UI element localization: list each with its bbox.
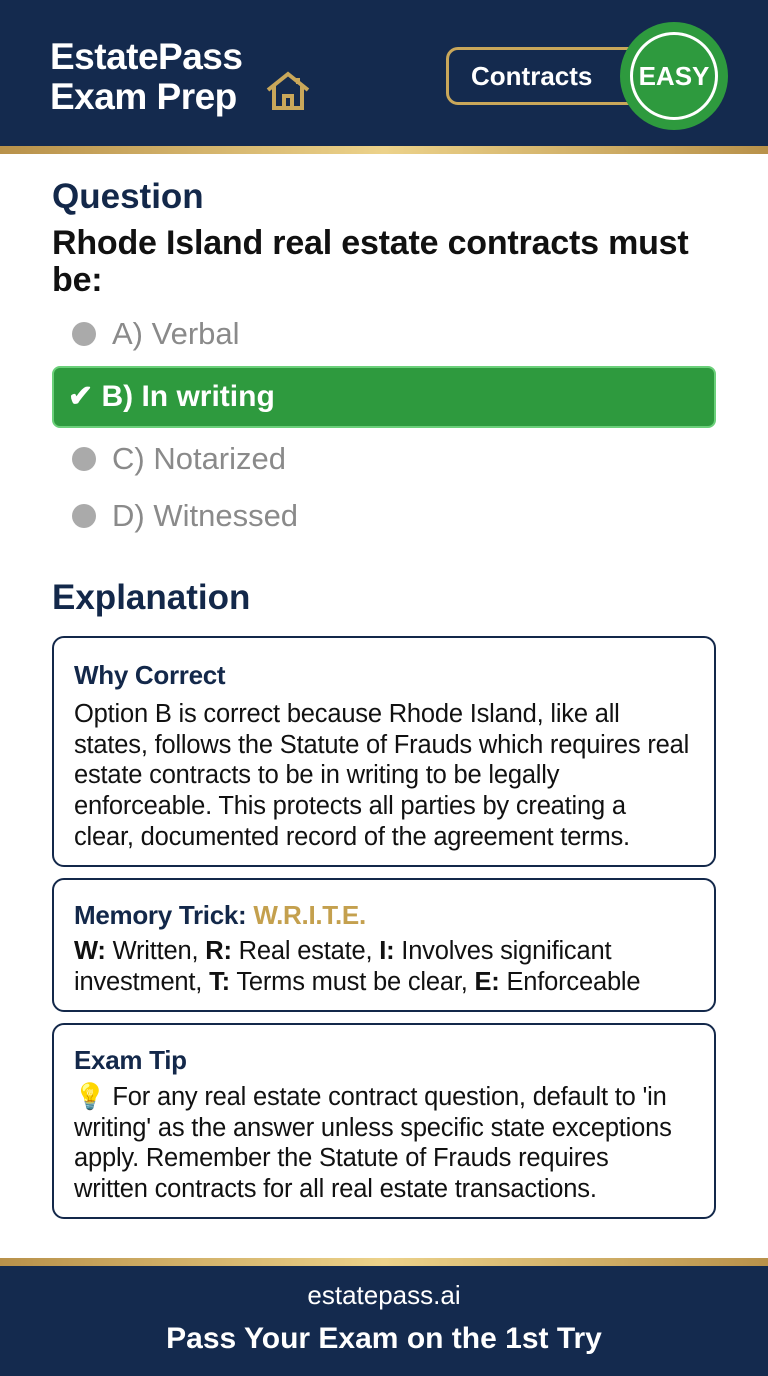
panel: exam tip: apply. Remember the Statute of Frauds requires	[74, 1144, 609, 1172]
heading: Question: Question	[52, 177, 204, 216]
panel: exam tip: written contracts for all real estate transactions.	[74, 1175, 597, 1203]
logo title: EstatePass	[50, 36, 242, 77]
category badge	[446, 47, 646, 105]
question text: Rhode Island real estate contracts must	[52, 224, 689, 262]
panel: exam tip: Exam Tip	[74, 1045, 187, 1075]
header	[0, 0, 768, 146]
panel: why correct: states, follows the Statute of Frauds which requires real	[74, 731, 689, 759]
panel: memory trick: W: Written, R: Real estate, I: Involves significant	[74, 937, 611, 965]
panel: why correct: Option B is correct because Rhode Island, like all	[74, 700, 620, 728]
panel: why correct: clear, documented record of the agreement terms.	[74, 823, 630, 851]
panel: exam tip: writing' as the answer unless specific state exceptions	[74, 1114, 672, 1142]
heading: Explanation: Explanation	[52, 578, 250, 617]
panel: exam tip: 💡 For any real estate contract question, default to 'in	[74, 1083, 667, 1111]
option B correct	[52, 366, 716, 428]
difficulty seal: EASY	[639, 61, 709, 91]
footer url: estatepass.ai	[307, 1280, 461, 1310]
panel: why correct: estate contracts to be in writing to be legally	[74, 761, 559, 789]
panel: why correct	[52, 636, 716, 867]
panel: exam tip	[52, 1023, 716, 1219]
icon: house	[266, 72, 310, 110]
footer tagline: Pass Your Exam on the 1st Try	[166, 1322, 602, 1355]
panel: memory trick: Memory Trick: W.R.I.T.E.	[74, 900, 366, 930]
footer	[0, 1266, 768, 1376]
question text	[52, 224, 689, 299]
panel: memory trick	[52, 878, 716, 1012]
category badge: Contracts	[471, 61, 592, 91]
option D: D) Witnessed	[112, 498, 298, 533]
option B correct: ✔ B) In writing	[68, 380, 275, 413]
question text: be:	[52, 261, 102, 299]
panel: memory trick: investment, T: Terms must be clear, E: Enforceable	[74, 968, 640, 996]
option A: A) Verbal	[112, 316, 240, 351]
logo title: Exam Prep	[50, 76, 237, 117]
panel: why correct: enforceable. This protects all parties by creating a	[74, 792, 626, 820]
panel: why correct: Why Correct	[74, 660, 225, 690]
difficulty seal	[620, 22, 728, 130]
option C: C) Notarized	[112, 441, 286, 476]
logo title	[50, 36, 242, 117]
